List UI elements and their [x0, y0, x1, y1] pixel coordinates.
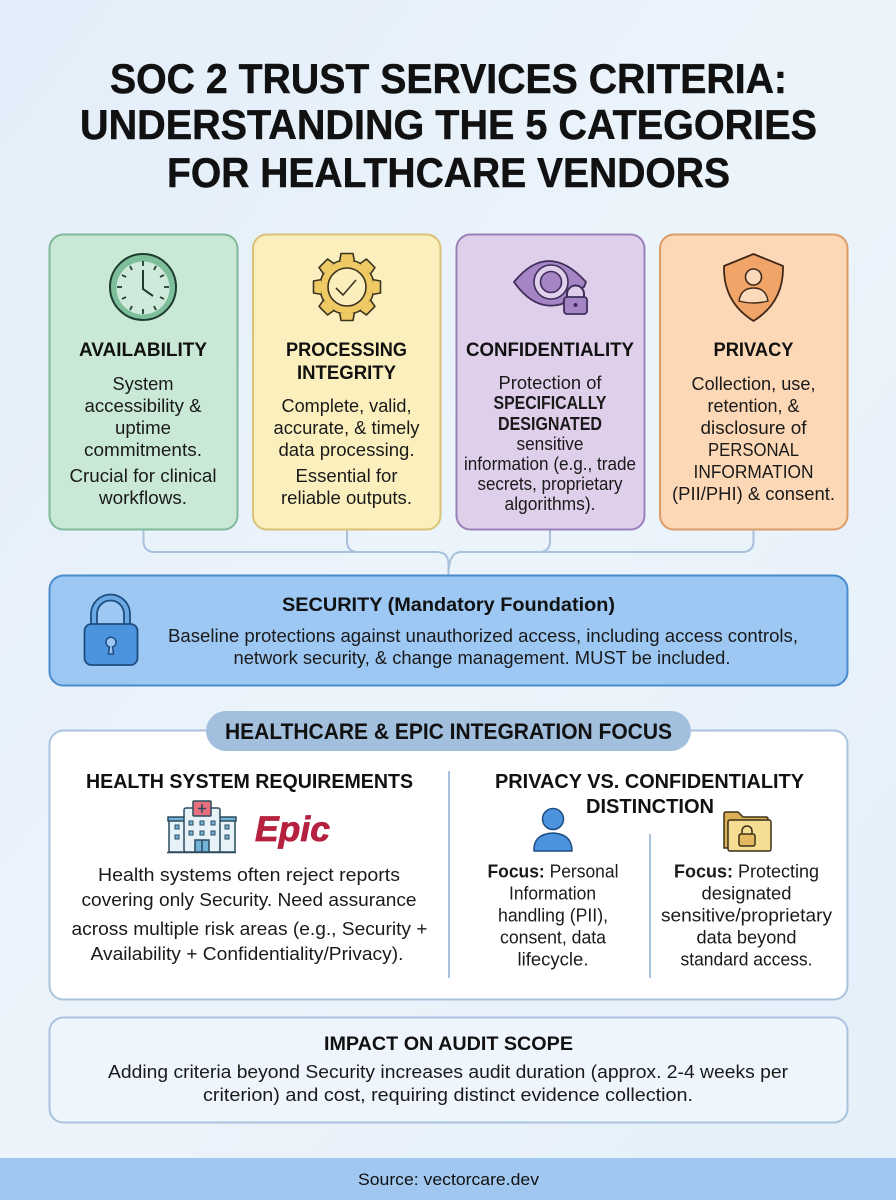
panel: processing integrity [253, 234, 440, 530]
text: security description: network security, & change management. MUST be included. [234, 647, 730, 668]
text: confidentiality description: information (e.g., trade [464, 453, 636, 474]
text: privacy description: retention, & [708, 395, 800, 416]
text: confidentiality description: Protection of [498, 372, 602, 393]
text: impact description: Adding criteria beyond Security increases audit duration (approx. 2-4 weeks per [108, 1061, 788, 1082]
text: privacy focus [488, 860, 618, 970]
title: SOC 2 TRUST SERVICES CRITERIA: [110, 55, 787, 102]
text: privacy focus: consent, data [500, 926, 607, 948]
badge: section heading: HEALTHCARE & EPIC INTEGRATION FOCUS [225, 719, 672, 744]
text: processing integrity description: accurate, & timely [274, 417, 420, 438]
heading: privacy vs confidentiality distinction: DISTINCTION [586, 796, 714, 818]
text: confidentiality focus: standard access. [680, 948, 812, 970]
text: privacy description: Collection, use, [692, 373, 816, 394]
heading: health system requirements: HEALTH SYSTEM REQUIREMENTS [86, 771, 413, 793]
icon: hospital [167, 801, 236, 852]
text: privacy focus: handling (PII), [498, 904, 608, 926]
panel: confidentiality [456, 234, 644, 530]
heading: impact on audit scope: IMPACT ON AUDIT SCOPE [324, 1033, 573, 1055]
text: privacy focus: Focus: Personal [488, 860, 618, 882]
icon: gear with check [314, 254, 380, 320]
title: FOR HEALTHCARE VENDORS [167, 149, 730, 196]
text: availability description [70, 373, 216, 508]
heading: availability: AVAILABILITY [79, 339, 207, 361]
divider: vertical [448, 771, 450, 978]
text: availability description: workflows. [98, 487, 187, 508]
panel: healthcare and epic integration focus [50, 711, 848, 1000]
icon: clock [110, 254, 176, 320]
text: health system requirements [72, 864, 428, 964]
text: security description [168, 625, 798, 668]
text: privacy description: (PII/PHI) & consent. [672, 483, 835, 504]
heading: processing integrity: PROCESSING [286, 339, 407, 361]
heading: processing integrity [286, 339, 407, 384]
text: confidentiality description: algorithms). [504, 493, 596, 514]
badge: section heading [206, 711, 691, 751]
text: confidentiality focus [661, 860, 833, 970]
icon: shield with person [724, 254, 783, 321]
text: health system requirements: Health systems often reject reports [98, 864, 400, 885]
text: impact description [108, 1061, 788, 1105]
logo: Epic: Epic [255, 810, 330, 849]
text: confidentiality description: secrets, proprietary [478, 473, 623, 494]
footer: source: Source: vectorcare.dev [358, 1171, 540, 1189]
heading: privacy vs confidentiality distinction [495, 771, 805, 818]
icon: padlock [84, 594, 138, 665]
text: availability description: accessibility & [84, 395, 202, 416]
text: confidentiality focus: Focus: Protecting [674, 860, 819, 882]
text: availability description: Crucial for clinical [70, 465, 216, 486]
text: confidentiality focus: designated [702, 882, 792, 904]
title: UNDERSTANDING THE 5 CATEGORIES [80, 101, 817, 148]
text: health system requirements: across multiple risk areas (e.g., Security + [72, 918, 428, 939]
text: confidentiality description: sensitive [516, 433, 584, 454]
text: availability description: System [112, 373, 174, 394]
text: privacy focus: Information [509, 882, 596, 904]
panel: availability [50, 234, 238, 530]
panel: privacy [660, 234, 848, 530]
heading: processing integrity: INTEGRITY [297, 362, 396, 384]
title [80, 55, 817, 196]
panel: impact on audit scope [50, 1018, 848, 1122]
heading: privacy vs confidentiality distinction: PRIVACY VS. CONFIDENTIALITY [495, 771, 805, 793]
text: impact description: criterion) and cost, requiring distinct evidence collection. [203, 1084, 693, 1105]
text: processing integrity description: Essential for [296, 465, 398, 486]
text: confidentiality description [464, 372, 636, 514]
text: confidentiality description: DESIGNATED [498, 413, 602, 434]
text: processing integrity description: data processing. [278, 439, 414, 460]
text: privacy description: PERSONAL [708, 439, 799, 460]
heading: security: SECURITY (Mandatory Foundation) [282, 594, 615, 616]
text: confidentiality focus: sensitive/proprietary [661, 904, 833, 926]
text: privacy description [672, 373, 835, 504]
text: processing integrity description [274, 395, 420, 508]
heading: confidentiality: CONFIDENTIALITY [466, 339, 634, 361]
icon: person [534, 808, 572, 851]
text: availability description: uptime [115, 417, 171, 438]
text: privacy description: disclosure of [700, 417, 807, 438]
text: health system requirements: covering only Security. Need assurance [82, 889, 416, 910]
connector lines [144, 530, 754, 575]
text: privacy focus: lifecycle. [518, 948, 588, 970]
text: processing integrity description: reliable outputs. [281, 487, 412, 508]
icon: eye with lock [514, 261, 587, 314]
text: security description: Baseline protections against unauthorized access, including access controls, [168, 625, 798, 646]
text: health system requirements: Availability + Confidentiality/Privacy). [90, 943, 404, 964]
heading: privacy: PRIVACY [714, 339, 794, 361]
text: processing integrity description: Complete, valid, [282, 395, 412, 416]
text: confidentiality description: SPECIFICALLY [494, 392, 607, 413]
text: confidentiality focus: data beyond [696, 926, 796, 948]
panel: security foundation [50, 576, 848, 686]
footer: source [0, 1158, 896, 1200]
text: availability description: commitments. [84, 439, 202, 460]
icon: folder with lock [724, 812, 771, 851]
divider: privacy vs confidentiality [649, 834, 651, 978]
text: privacy description: INFORMATION [694, 461, 814, 482]
